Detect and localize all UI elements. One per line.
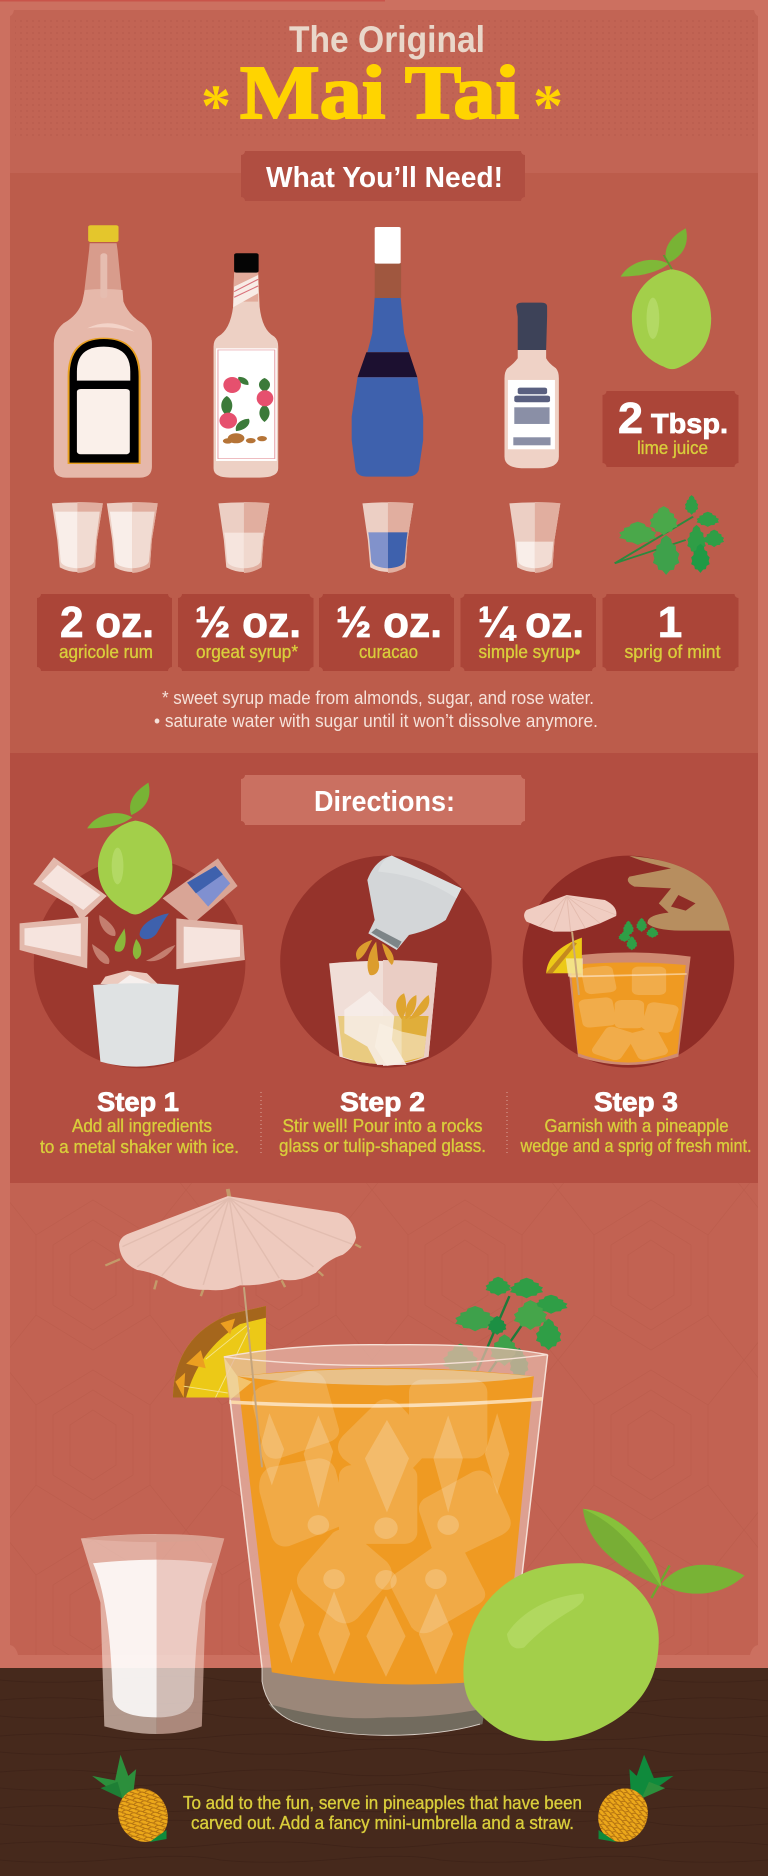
- badge: agricole rum: [37, 594, 172, 671]
- badge: mint: sprig of mint: [624, 642, 720, 662]
- title: *: [533, 73, 563, 139]
- bottle: curacao: [352, 227, 423, 477]
- badge: orgeat syrup: orgeat syrup*: [196, 642, 298, 662]
- badge: curacao: ½ oz.: [336, 598, 442, 647]
- shot glasses row: [52, 495, 724, 575]
- icon: mint sprig: [615, 495, 724, 575]
- title: Mai Tai: [240, 51, 519, 135]
- illustration: step 3: [523, 856, 734, 1068]
- illustration: step 1: [20, 783, 245, 1068]
- pineapple: right: [592, 1755, 673, 1847]
- badge: lime juice: lime juice: [637, 438, 708, 458]
- heading: Directions: [241, 775, 525, 825]
- bottle: orgeat: [214, 253, 278, 478]
- footnotes: [154, 688, 598, 731]
- icon: lime: [621, 228, 711, 369]
- bottles and lime group: [54, 225, 711, 478]
- badge: orgeat syrup: [178, 594, 314, 671]
- mint garnish: [443, 1277, 568, 1382]
- badge: curacao: curacao: [359, 642, 418, 662]
- badge: agricole rum: 2 oz.: [60, 598, 154, 647]
- footnotes: • saturate water with sugar until it won’t dissolve anymore.: [154, 711, 598, 731]
- hero illustration: [81, 1189, 744, 1741]
- footnotes: * sweet syrup made from almonds, sugar, and rose water.: [162, 688, 594, 708]
- step 2 text: Stir well! Pour into a rocks: [282, 1116, 482, 1136]
- heading: Directions: Directions:: [314, 786, 455, 818]
- shot glass: curacao: [362, 502, 413, 573]
- badge: orgeat syrup: ½ oz.: [195, 598, 301, 647]
- badge: mint: 1: [658, 598, 682, 647]
- shot glass: [81, 1534, 224, 1734]
- step 2 text: [279, 1087, 486, 1156]
- title: The Original: [289, 19, 485, 60]
- step 2 text: glass or tulip-shaped glass.: [279, 1136, 486, 1156]
- badge: lime juice: 2: [618, 394, 643, 443]
- pineapple: left: [92, 1755, 174, 1847]
- closing note: To add to the fun, serve in pineapples that have been: [183, 1793, 582, 1813]
- step 1 text: [40, 1087, 239, 1157]
- shot glass: simple syrup: [509, 502, 560, 575]
- step 3 text: Step 3: [594, 1087, 678, 1117]
- step 3 text: [520, 1087, 752, 1156]
- divider: [261, 1092, 507, 1155]
- badge: curacao: [319, 594, 454, 671]
- shot glass: orgeat: [218, 502, 269, 573]
- closing note: carved out. Add a fancy mini-umbrella and a straw.: [191, 1813, 574, 1833]
- closing note: [183, 1793, 582, 1833]
- bottle: rum: [54, 225, 152, 478]
- heading: What You'll Need: [241, 151, 525, 201]
- panel: header: [10, 10, 758, 173]
- step 1 text: Step 1: [97, 1087, 179, 1117]
- shot glass: rum 2: [107, 502, 158, 575]
- lime: [463, 1509, 744, 1741]
- badge: simple syrup: ¼ oz.: [478, 598, 584, 647]
- bottle: simple syrup: [504, 303, 559, 468]
- illustration: step 2: [280, 856, 492, 1068]
- badge: mint: [602, 594, 738, 671]
- step 1 text: Add all ingredients: [72, 1116, 212, 1136]
- step illustrations: [20, 783, 734, 1068]
- badge: lime juice: Tbsp.: [651, 408, 728, 439]
- badge: lime juice: [602, 391, 738, 467]
- panel: directions: [10, 753, 758, 1183]
- title: *: [201, 73, 231, 139]
- panel: patterned drink background: [10, 1183, 758, 1655]
- title: [201, 19, 563, 139]
- step 1 text: to a metal shaker with ice.: [40, 1137, 239, 1157]
- tall glass: [224, 1287, 548, 1735]
- panel: ingredients: [10, 173, 758, 753]
- umbrella: [105, 1189, 361, 1296]
- badge: agricole rum: agricole rum: [59, 642, 153, 662]
- badge: simple syrup: simple syrup•: [478, 642, 580, 662]
- badge: simple syrup: [460, 594, 596, 671]
- shot glass: rum 1: [52, 502, 103, 575]
- step 2 text: Step 2: [340, 1087, 425, 1117]
- heading: What You'll Need: What You’ll Need!: [266, 162, 503, 194]
- wooden table: [0, 1668, 768, 1876]
- pineapple wedge: [173, 1306, 266, 1398]
- step 3 text: Garnish with a pineapple: [544, 1116, 728, 1136]
